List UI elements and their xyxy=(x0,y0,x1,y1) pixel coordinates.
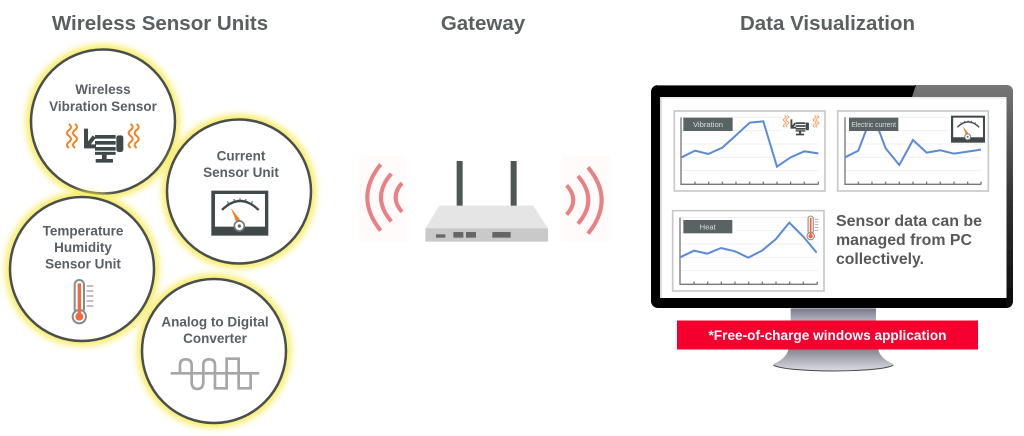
label: analog to digital converter: Analog to Digital xyxy=(161,314,269,330)
chart: vibration: Vibration xyxy=(693,120,723,129)
icon: router xyxy=(425,161,548,242)
icon: analog meter xyxy=(211,191,268,236)
icon: right signal waves xyxy=(567,167,602,234)
icon: left signal waves xyxy=(367,164,402,231)
chart: electric current xyxy=(838,111,988,191)
icon: vibrating motor xyxy=(67,124,139,163)
text: sensor data description: managed from PC xyxy=(836,232,972,249)
heading: Data Visualization: Data Visualization xyxy=(740,12,915,35)
panel: monitor xyxy=(651,85,1013,308)
chart: heat xyxy=(673,211,824,291)
icon: analog and digital wave xyxy=(171,359,259,389)
label: temperature humidity sensor unit: Sensor Unit xyxy=(45,256,121,272)
label: temperature humidity sensor unit: Humidity xyxy=(54,240,112,255)
chart: vibration xyxy=(674,111,825,191)
heading: Gateway: Gateway xyxy=(441,12,526,35)
callout: free-of-charge application banner xyxy=(677,320,978,350)
text: sensor data description: collectively. xyxy=(836,251,924,268)
label: current sensor unit: Current xyxy=(217,148,266,164)
icon: analog meter small xyxy=(951,116,985,143)
chart: electric current: Electric current xyxy=(851,120,896,129)
chart: heat: Heat xyxy=(700,222,717,231)
panel: current sensor unit xyxy=(162,114,316,268)
icon: gateway with signal waves xyxy=(359,156,610,242)
icon: thermometer xyxy=(73,280,93,323)
label: wireless vibration sensor: Wireless xyxy=(75,82,131,97)
callout: free-of-charge application banner: *Free-of-charge windows application xyxy=(708,328,946,343)
icon: monitor stand xyxy=(773,308,893,371)
panel: analog to digital converter xyxy=(137,274,291,428)
label: temperature humidity sensor unit: Temperature xyxy=(43,224,124,238)
label: current sensor unit: Sensor Unit xyxy=(203,165,279,180)
text: sensor data description: Sensor data can be xyxy=(836,213,982,230)
panel: wireless vibration sensor xyxy=(26,44,180,198)
label: wireless vibration sensor: Vibration Sensor xyxy=(49,99,158,114)
heading: Wireless Sensor Units: Wireless Sensor Units xyxy=(52,12,268,35)
icon: vibrating motor small xyxy=(783,115,819,135)
panel: temperature humidity sensor unit xyxy=(5,192,159,346)
icon: thermometer small xyxy=(807,216,818,240)
label: analog to digital converter: Converter xyxy=(183,331,248,346)
